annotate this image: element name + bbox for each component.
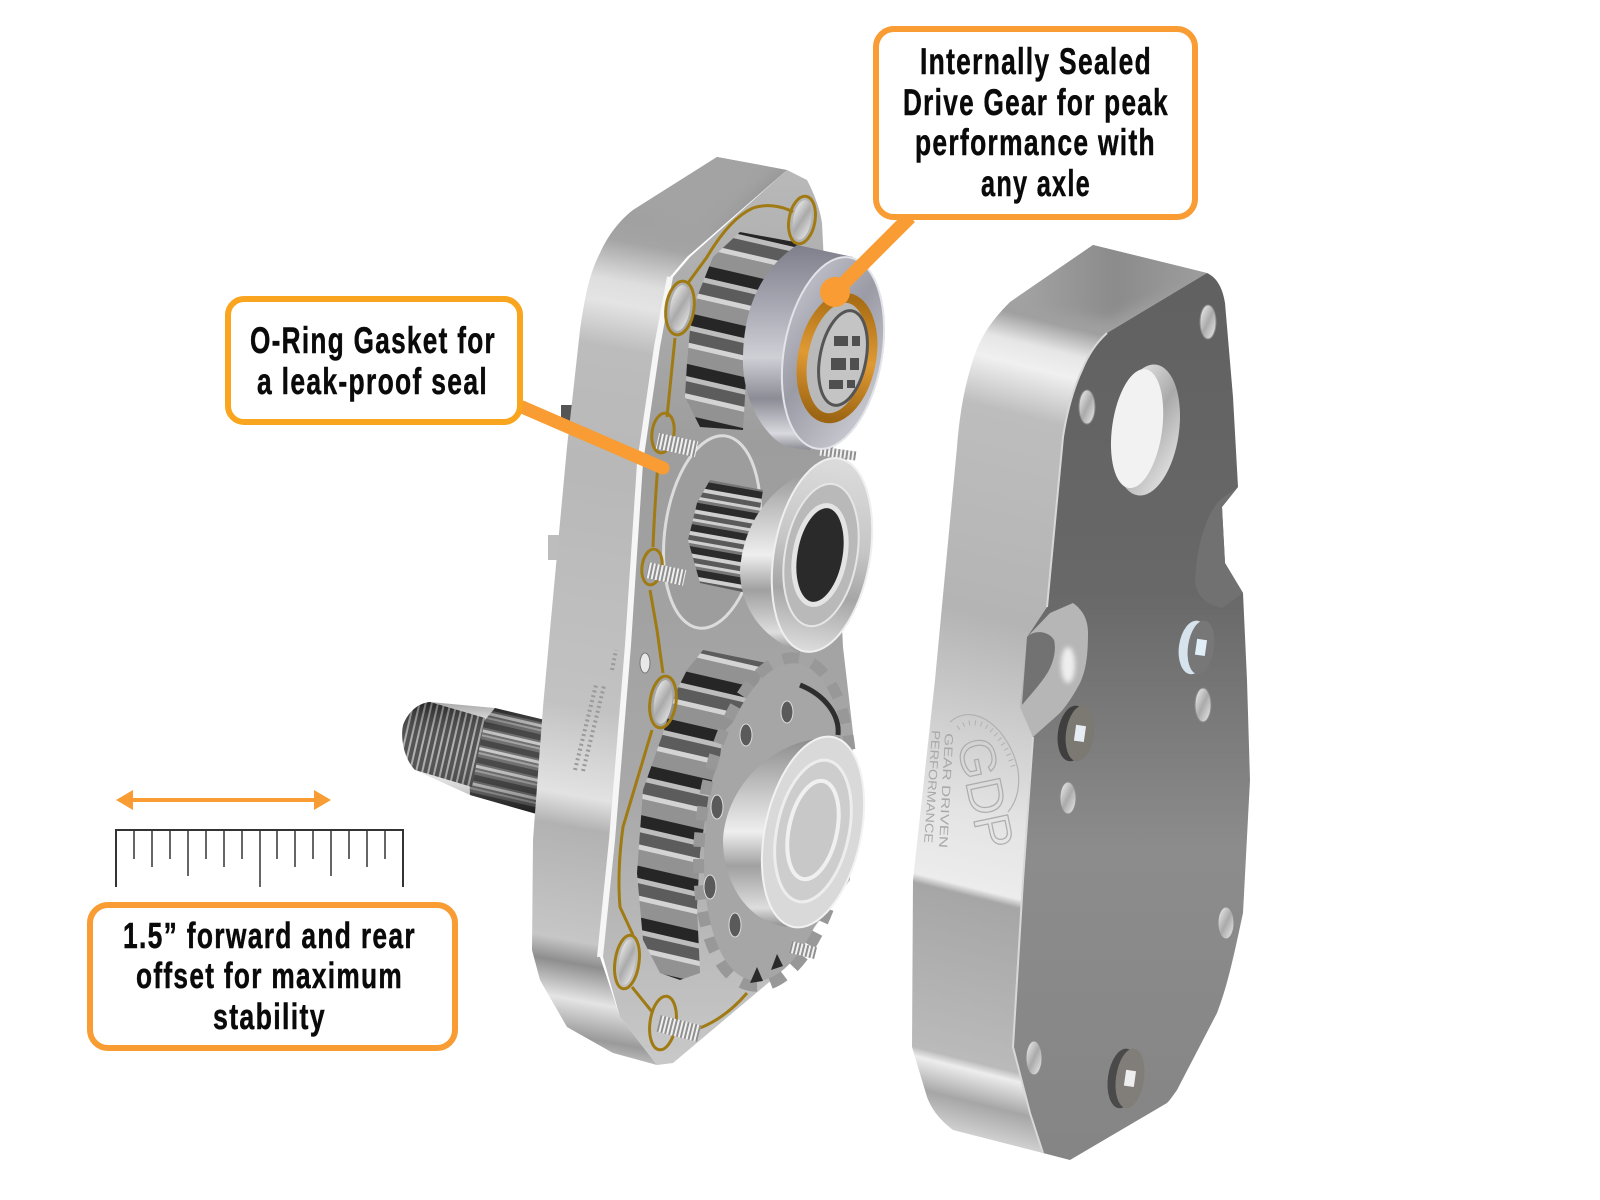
socket bolt middle xyxy=(1054,703,1098,764)
lower bearing xyxy=(723,727,880,937)
needle cage xyxy=(811,306,875,410)
callout: o-ring gasket xyxy=(228,299,520,422)
sprocket dark arc xyxy=(800,685,838,735)
output shaft thread xyxy=(402,702,485,787)
housing top surface xyxy=(634,157,780,210)
top bearing cylinder xyxy=(743,245,853,450)
left housing with gear train xyxy=(402,130,898,1065)
ruler scale xyxy=(116,830,403,887)
callout: o-ring gasket: a leak-proof seal xyxy=(257,361,488,402)
double-headed offset arrow xyxy=(116,790,331,810)
engraved GDP logo: GDP xyxy=(946,733,1024,854)
callout: forward and rear offset xyxy=(90,905,455,1048)
gasket ring hole highlights xyxy=(616,199,814,986)
callout: internally sealed drive gear xyxy=(876,29,1195,217)
lower sprocket xyxy=(685,654,865,990)
cage rollers xyxy=(829,336,860,389)
cover top surface xyxy=(1012,245,1206,320)
leader: drive gear callout xyxy=(820,217,910,307)
cover edge highlight xyxy=(1013,333,1107,1153)
top bearing face xyxy=(768,249,898,457)
middle bearing ring xyxy=(773,478,869,632)
callout: internally sealed drive gear: any axle xyxy=(981,163,1091,204)
small mounting holes xyxy=(1026,305,1234,1075)
lower bearing ring xyxy=(763,753,863,909)
socket bolt lower xyxy=(1104,1046,1148,1111)
middle bearing bore xyxy=(787,501,853,609)
upper input gear teeth xyxy=(685,232,800,430)
middle washer xyxy=(652,429,772,635)
engraved GDP logo: GEAR DRIVEN xyxy=(936,733,956,848)
pocket highlight xyxy=(1061,647,1075,683)
middle bearing cylinder xyxy=(740,458,847,652)
lower bearing face xyxy=(746,727,880,937)
middle bearing xyxy=(740,450,886,660)
rear stubs xyxy=(561,405,575,423)
lower large gear teeth xyxy=(637,650,767,980)
small locating hole xyxy=(640,653,650,673)
pocket xyxy=(1020,603,1088,737)
notch fillet xyxy=(1195,487,1243,608)
right housing cover xyxy=(912,220,1250,1160)
sprocket holes xyxy=(704,701,793,937)
output shaft splines xyxy=(468,708,545,815)
large bore xyxy=(1103,360,1188,500)
housing side wall xyxy=(532,157,787,1065)
callout: internally sealed drive gear: Internally Sealed xyxy=(920,41,1152,82)
middle bearing face xyxy=(758,450,886,660)
callout: internally sealed drive gear: performance with xyxy=(915,122,1156,163)
bronze seal ring xyxy=(792,292,882,424)
cover main face xyxy=(1013,273,1250,1160)
engraved GDP logo xyxy=(921,715,1024,854)
callout: o-ring gasket: O-Ring Gasket for xyxy=(250,320,496,361)
white edge highlight xyxy=(600,277,670,957)
O-ring gasket xyxy=(611,194,819,1052)
callout: forward and rear offset: 1.5” forward and rear xyxy=(123,915,416,956)
pocket inner xyxy=(1022,632,1055,705)
leader: gasket callout xyxy=(522,407,663,468)
housing face plate xyxy=(603,170,853,1065)
callout: forward and rear offset: offset for maximum xyxy=(136,955,403,996)
cover side wall xyxy=(912,245,1207,1153)
lower bearing cylinder xyxy=(723,737,840,927)
sprocket lower dark teeth xyxy=(750,954,783,983)
lower bearing bore xyxy=(779,776,847,884)
engraved side marks xyxy=(575,650,616,771)
callout: forward and rear offset: stability xyxy=(213,996,326,1037)
socket bolt upper xyxy=(1175,618,1218,677)
callout: internally sealed drive gear: Drive Gear for peak xyxy=(903,82,1169,123)
threaded studs xyxy=(646,433,856,1042)
top bearing xyxy=(743,245,898,457)
output shaft shading xyxy=(402,702,545,815)
engraved GDP logo: PERFORMANCE xyxy=(921,730,943,843)
middle pinion teeth xyxy=(688,480,763,593)
